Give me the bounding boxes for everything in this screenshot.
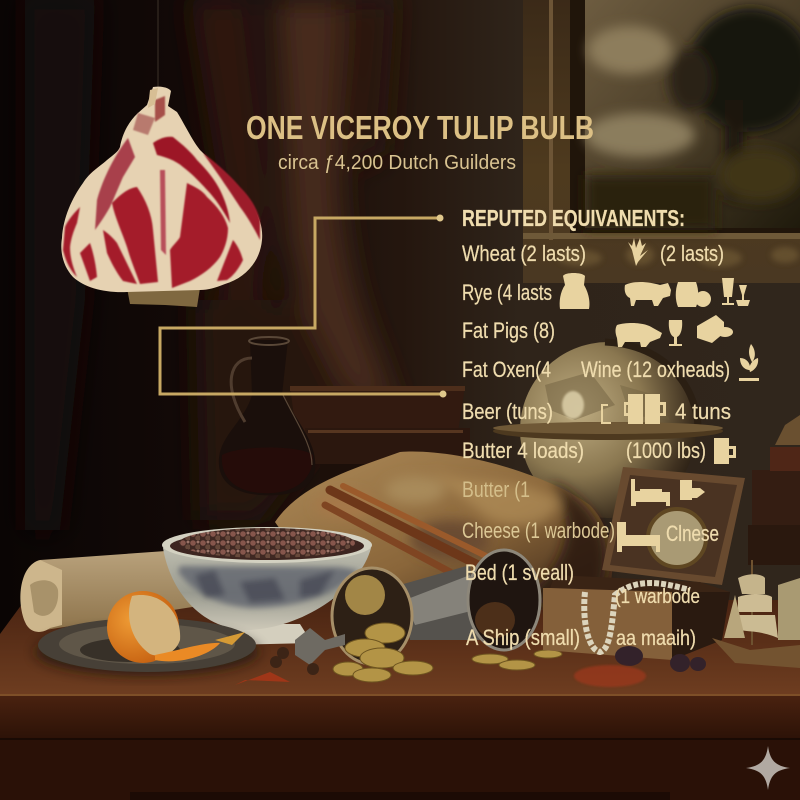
icon: goblets xyxy=(722,278,734,305)
saffron threads right xyxy=(574,665,646,687)
icon: pig xyxy=(616,323,662,347)
row: fat pigs: Fat Pigs (8) xyxy=(462,318,555,343)
scroll of paper xyxy=(20,550,205,632)
goblet foot xyxy=(468,550,540,650)
row: fat oxen xyxy=(462,344,759,382)
goblet stem ornament xyxy=(295,628,345,665)
icon: barrels xyxy=(676,282,698,307)
hanging thread xyxy=(157,0,159,90)
row: beer: 4 tuns xyxy=(675,399,731,424)
cloth folds xyxy=(315,470,606,610)
icon: jug xyxy=(680,480,705,500)
row: ship xyxy=(466,625,696,650)
table front edge xyxy=(0,694,800,800)
silver goblet with coins xyxy=(295,550,540,665)
row: cheese xyxy=(462,518,719,552)
icon: plant xyxy=(739,344,759,381)
row: fat oxen: Wine (12 oxheads) xyxy=(581,357,730,382)
landscape canvas xyxy=(585,0,800,230)
pewter plate xyxy=(35,618,259,676)
row: butter (faded): Butter (1 xyxy=(462,477,530,502)
icon: cheese xyxy=(697,315,724,343)
icon: bed xyxy=(617,522,660,552)
peeled orange xyxy=(107,591,245,663)
curtain drapery xyxy=(25,0,400,530)
globe on stand xyxy=(493,342,723,518)
goblet mouth xyxy=(332,568,412,664)
base roots xyxy=(127,288,200,307)
model ship xyxy=(712,560,800,668)
meridian arc xyxy=(605,342,698,425)
row: beer: Beer (tuns) xyxy=(462,399,553,424)
icon: cheese wheel xyxy=(717,327,733,337)
row: ship: aa maaih) xyxy=(616,627,696,650)
icon: grain sack xyxy=(560,273,589,309)
tulip bulb xyxy=(61,87,262,307)
icon: pig xyxy=(625,282,671,306)
title: ONE VICEROY TULIP BULB xyxy=(246,109,594,146)
row: wheat: (2 lasts) xyxy=(660,241,724,266)
porcelain bowl of peppercorns xyxy=(162,527,372,645)
pearl necklace xyxy=(584,583,690,652)
peppercorns xyxy=(179,528,355,558)
table top xyxy=(0,600,800,695)
row: fat oxen: Fat Oxen(4 xyxy=(462,357,551,382)
icon: wheat xyxy=(628,238,648,266)
pocket watch xyxy=(648,509,706,567)
row: butter loads xyxy=(462,438,736,464)
row: butter loads: Butter 4 loads) xyxy=(462,438,584,463)
upper petal tips xyxy=(148,88,158,108)
open wooden chest xyxy=(543,467,745,660)
goblet body xyxy=(400,565,480,640)
row: warbode note: (1 warbode xyxy=(615,586,700,608)
wine carafe xyxy=(219,337,315,495)
saffron threads left xyxy=(215,672,290,695)
row: wheat: Wheat (2 lasts) xyxy=(462,241,586,266)
icon: glass and dish xyxy=(736,285,750,306)
gold coins xyxy=(333,623,562,682)
nutmegs xyxy=(270,647,319,675)
icon: sparkle watermark xyxy=(746,746,790,790)
icon: bed xyxy=(631,479,670,506)
patterned cloth xyxy=(275,452,612,610)
row: butter loads: (1000 lbs) xyxy=(626,438,706,463)
list heading: REPUTED EQUIVANENTS: xyxy=(462,205,685,231)
row: cheese: Clnese xyxy=(666,521,719,546)
row: ship: A Ship (small) xyxy=(466,625,580,650)
cinnamon sticks xyxy=(325,486,486,572)
row: wheat xyxy=(462,238,724,266)
chest base xyxy=(543,588,672,660)
icon: stray bracket xyxy=(602,405,611,423)
row: fat pigs xyxy=(462,315,733,347)
row: beer xyxy=(462,394,731,424)
dried figs xyxy=(615,646,706,672)
row: cheese: Cheese (1 warbode) xyxy=(462,518,615,543)
horizon ring xyxy=(493,422,723,440)
chest lid xyxy=(602,467,745,585)
frame xyxy=(523,0,800,283)
frame ornament xyxy=(558,245,799,267)
row: butter (faded) xyxy=(462,477,705,506)
icon: coin barrel xyxy=(695,291,711,307)
icon: beer mug xyxy=(714,438,736,464)
row: bed: Bed (1 sveall) xyxy=(465,560,574,585)
connector line xyxy=(160,214,446,398)
row: rye: Rye (4 lasts xyxy=(462,280,552,305)
painting in gilt frame xyxy=(523,0,800,283)
right books xyxy=(748,415,800,565)
subtitle: circa ƒ4,200 Dutch Guilders xyxy=(278,152,516,174)
icon: beer mugs xyxy=(624,394,666,424)
bulb body xyxy=(61,87,262,292)
red flames xyxy=(63,96,260,288)
icon: wine glass xyxy=(669,320,682,346)
books stack xyxy=(290,386,470,480)
row: rye xyxy=(462,273,750,309)
blue decoration xyxy=(178,566,358,608)
